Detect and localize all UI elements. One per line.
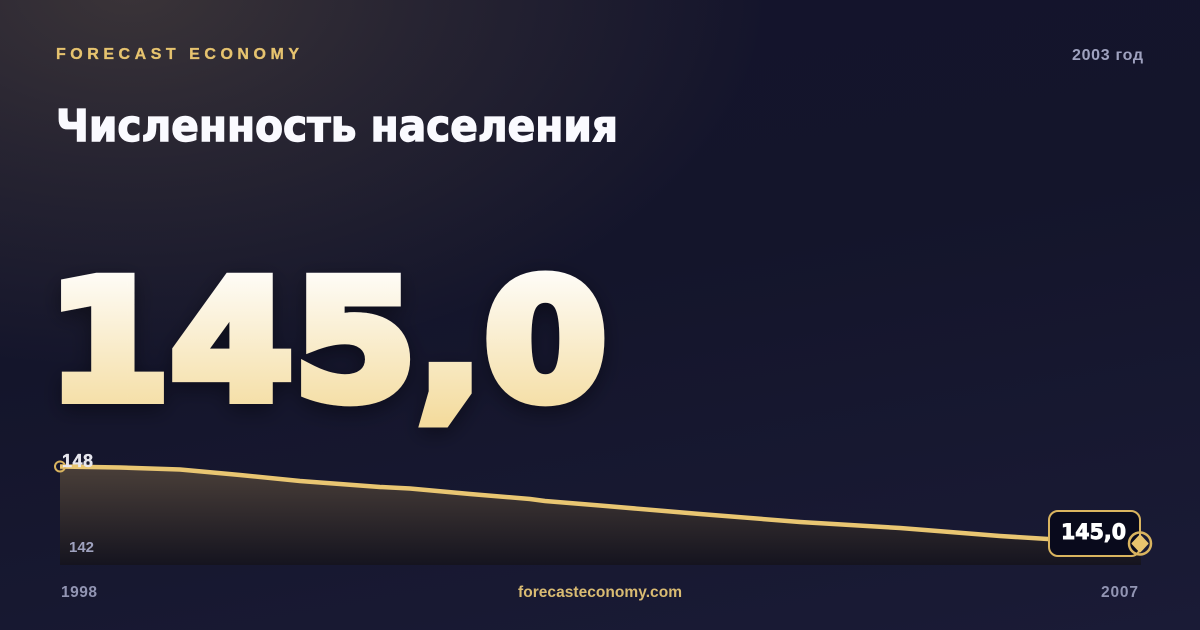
start year: 1998 [61, 584, 97, 601]
year label: 2003 год [1072, 47, 1143, 64]
title: Численность населения [56, 101, 618, 152]
area chart [55, 451, 1151, 565]
big value: 145,0 [47, 246, 607, 438]
start marker [55, 462, 65, 472]
axis max label: 148 [62, 451, 93, 471]
chart area fill [60, 466, 1141, 565]
axis min label: 142 [69, 539, 94, 556]
chart line [60, 466, 1141, 543]
axis max label: 148 [62, 451, 93, 471]
end year: 2007 [1101, 584, 1138, 601]
value badge: 145,0 [1061, 520, 1126, 544]
source url: forecasteconomy.com [518, 584, 682, 601]
end marker [1129, 532, 1151, 554]
value badge [1049, 511, 1140, 556]
brand label: FORECAST ECONOMY [56, 46, 299, 63]
